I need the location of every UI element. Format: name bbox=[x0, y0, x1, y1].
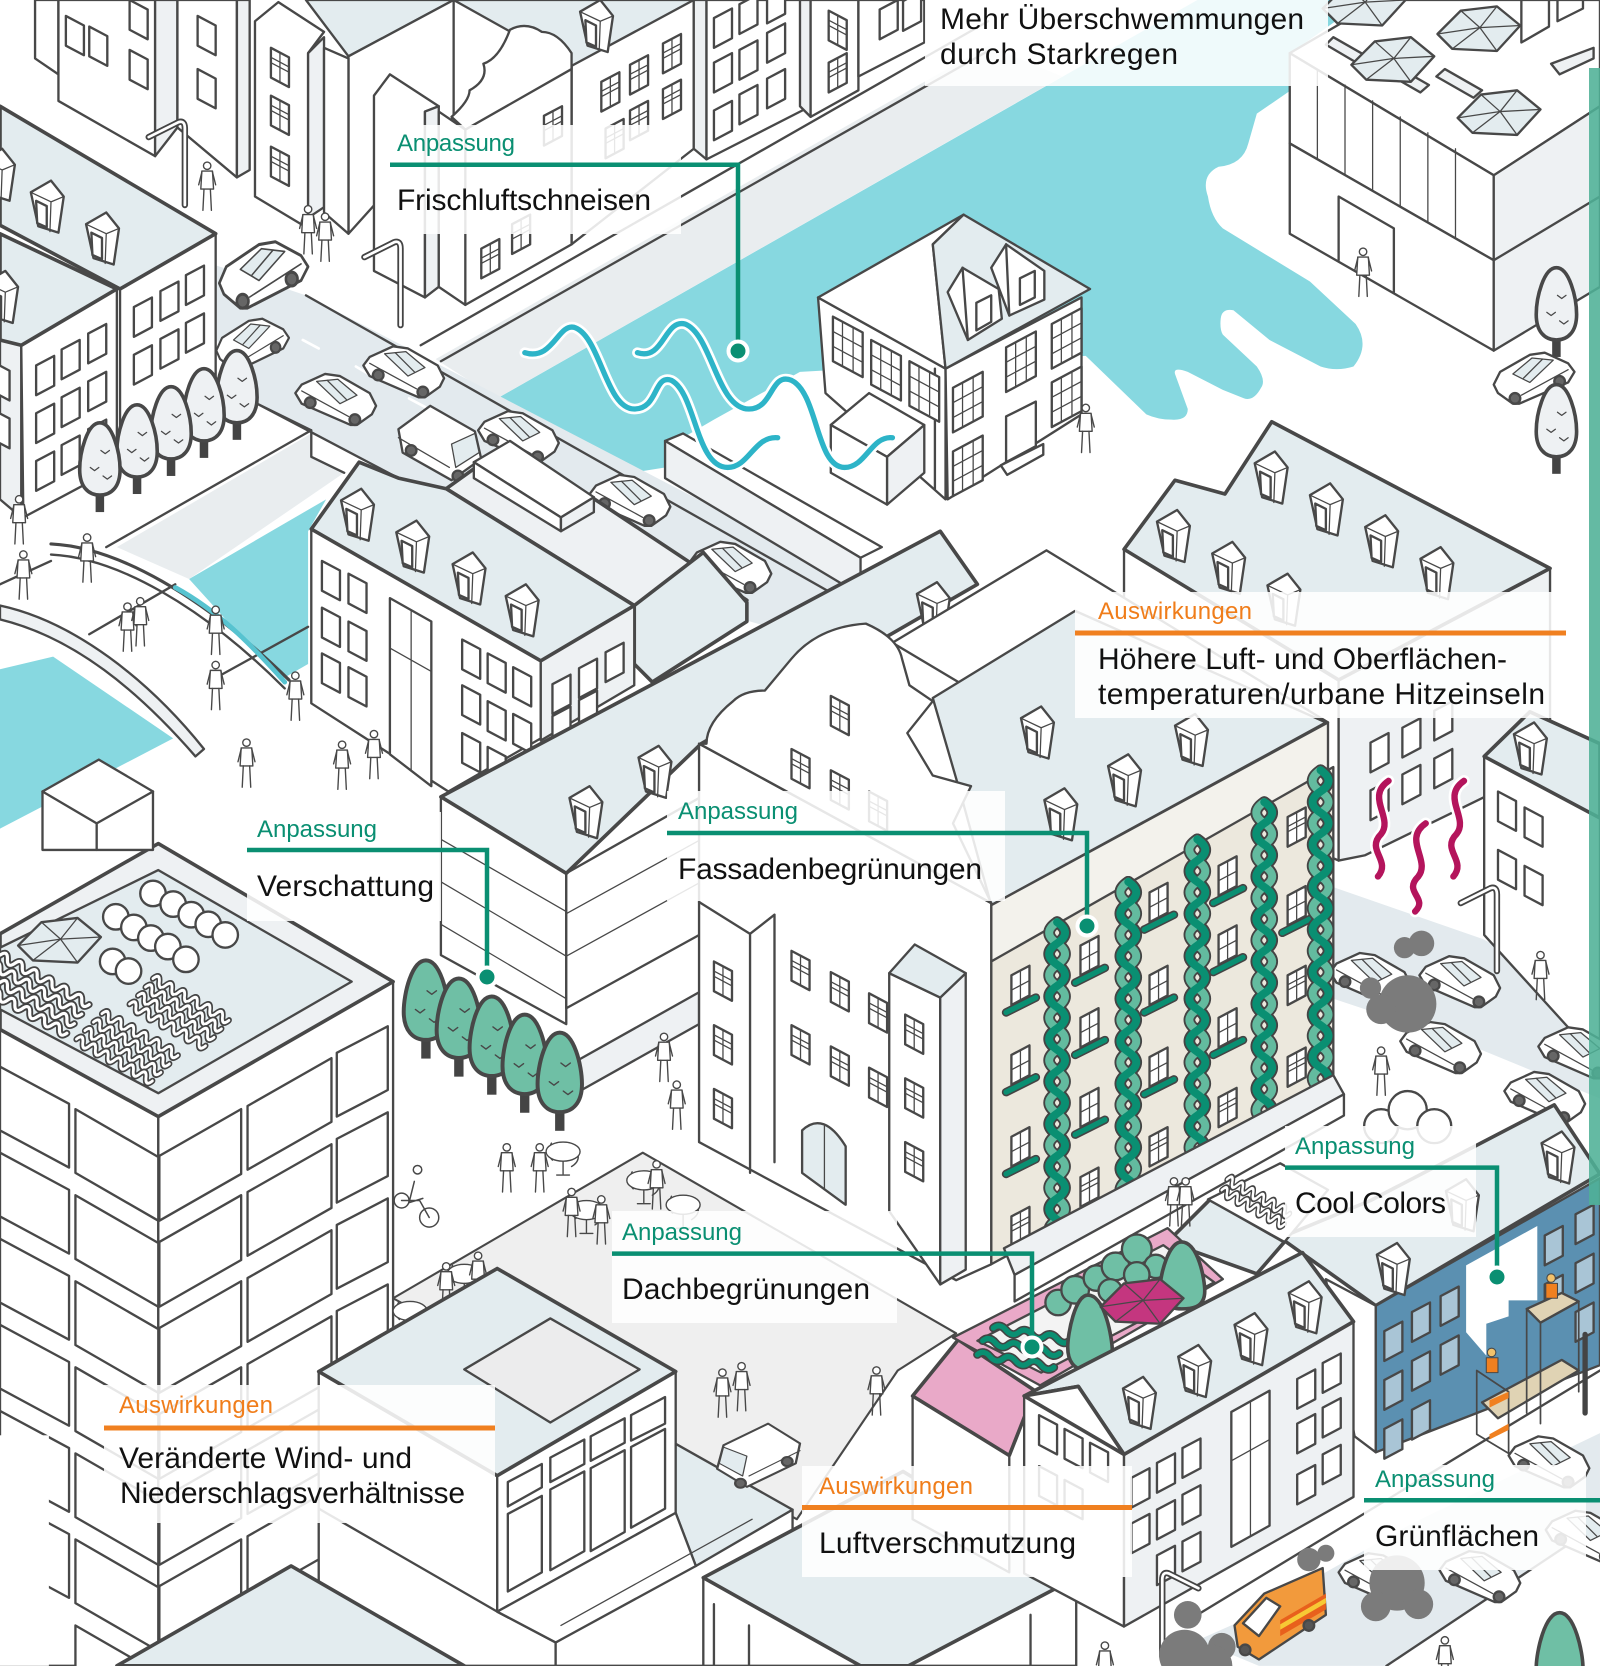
small rooftop box bbox=[42, 760, 153, 850]
street lamp bbox=[364, 242, 401, 325]
ornate white building bbox=[699, 624, 991, 1280]
bridge bbox=[0, 544, 289, 756]
text: flooding: durch Starkregen bbox=[940, 38, 1178, 71]
street lamps lower right bbox=[1162, 1334, 1585, 1656]
heading: Auswirkungen bbox=[1098, 598, 1252, 625]
roof garden building bbox=[913, 1228, 1223, 1572]
street lamp bbox=[149, 122, 185, 205]
big building: flat roof and mansard bbox=[892, 550, 1328, 961]
main road bbox=[217, 266, 882, 659]
rule bbox=[104, 1426, 495, 1430]
smog clouds bottom bbox=[1159, 1545, 1433, 1666]
callout: Grünflächen bbox=[1364, 1465, 1600, 1570]
road lines bbox=[0, 21, 988, 677]
text: Grünflächen bbox=[1375, 1520, 1539, 1553]
marker dot bbox=[728, 342, 748, 360]
low wall by canal bbox=[665, 433, 882, 595]
canal and flood water bbox=[497, 0, 1365, 473]
cafe tables bbox=[393, 1142, 700, 1334]
cars and smog right road bbox=[1330, 953, 1600, 1123]
text: flooding: Mehr Überschwemmungen bbox=[940, 3, 1304, 36]
heading: Anpassung bbox=[397, 130, 515, 157]
rule bbox=[1075, 630, 1566, 636]
mid-lower building bbox=[319, 1269, 676, 1666]
left white margin bbox=[0, 1435, 49, 1666]
building: rooftop terrace block bbox=[1290, 0, 1600, 351]
text: temperaturen/urbane Hitzeinseln bbox=[1098, 678, 1545, 711]
leader line bbox=[390, 165, 738, 351]
faded trees behind cool colors bbox=[1364, 1091, 1451, 1143]
heading: Anpassung bbox=[1375, 1466, 1495, 1493]
callout: Luftverschmutzung bbox=[802, 1466, 1132, 1577]
building: top row right of gable bbox=[800, 0, 924, 117]
terrace wing bbox=[319, 1444, 793, 1666]
smog clouds right bbox=[1360, 931, 1436, 1033]
facade base wall bbox=[1004, 1075, 1344, 1301]
front building with dormers bbox=[1024, 1253, 1353, 1627]
bottom left roof bbox=[117, 1566, 464, 1666]
marker dot bbox=[478, 968, 496, 986]
cyclist bbox=[394, 1165, 439, 1227]
green shading trees bbox=[404, 960, 582, 1131]
heading: Anpassung bbox=[622, 1219, 742, 1246]
text: Cool Colors bbox=[1295, 1187, 1446, 1220]
heading: Auswirkungen bbox=[119, 1392, 273, 1419]
heading: Anpassung bbox=[257, 816, 377, 843]
water under bridge bbox=[0, 499, 326, 829]
building: tower and roof bbox=[255, 0, 454, 234]
text: Dachbegrünungen bbox=[622, 1273, 870, 1306]
building: gabled row bbox=[374, 0, 811, 305]
text: Fassadenbegrünungen bbox=[678, 853, 982, 886]
callout: Frischluftschneisen bbox=[390, 125, 748, 360]
road right bbox=[1330, 886, 1600, 1099]
leader line bbox=[612, 1254, 1032, 1347]
ornate building side tower bbox=[889, 944, 966, 1284]
text: Niederschlagsverhältnisse bbox=[120, 1477, 465, 1510]
callout: Fassadenbegrünungen bbox=[667, 791, 1096, 936]
leader line bbox=[667, 833, 1087, 926]
building: bottom centre bbox=[703, 1471, 1076, 1666]
building: wave roof behind bbox=[1168, 1163, 1328, 1274]
tall office building bbox=[0, 982, 393, 1666]
green tree bottom right bbox=[1536, 1613, 1583, 1666]
marker dot bbox=[1022, 1338, 1042, 1356]
building: far right bbox=[1484, 712, 1600, 1062]
leader line bbox=[247, 850, 487, 977]
callout: Mehr Überschwemmungen bbox=[925, 0, 1328, 86]
building: left corner block bbox=[0, 106, 216, 517]
cars on main road bbox=[216, 242, 771, 593]
building: top left block bbox=[35, 0, 250, 177]
cars bottom road bbox=[1339, 1436, 1600, 1604]
rule bbox=[802, 1505, 1132, 1510]
lamp right bbox=[1461, 888, 1497, 971]
orange van bbox=[1235, 1568, 1326, 1659]
building: back row right with dormers bbox=[1124, 422, 1550, 861]
leader line bbox=[1285, 1168, 1497, 1277]
quay strips bbox=[117, 46, 1062, 579]
scaffold with painters bbox=[1477, 1274, 1579, 1453]
marker dot bbox=[1488, 1268, 1506, 1286]
air flow waves bbox=[525, 324, 892, 467]
office roof garden bbox=[0, 844, 393, 1117]
building: long hipped roof bbox=[441, 531, 977, 1093]
text: Frischluftschneisen bbox=[397, 184, 651, 217]
callout: Veränderte Wind- und Niederschlagsverhältnisse bbox=[104, 1385, 495, 1523]
heading: Anpassung bbox=[678, 798, 798, 825]
callout: Höhere Temperaturen bbox=[1075, 592, 1566, 718]
heading: Auswirkungen bbox=[819, 1473, 973, 1500]
callout: Cool Colors bbox=[1285, 1126, 1506, 1286]
text: Veränderte Wind- und bbox=[119, 1442, 412, 1475]
right edge green strip bbox=[1589, 68, 1600, 1205]
marker dot bbox=[1078, 916, 1096, 936]
grey trees row bbox=[80, 351, 257, 512]
building: central block with dormers bbox=[311, 441, 747, 791]
green facade bbox=[991, 767, 1333, 1264]
callout: Dachbegrünungen bbox=[612, 1211, 1042, 1356]
building: blue cool colors bbox=[1280, 1105, 1600, 1459]
grey plaza bbox=[393, 1153, 956, 1519]
trees and car right bbox=[1494, 268, 1577, 474]
rule bbox=[1364, 1498, 1600, 1502]
building: small house bbox=[818, 215, 1090, 505]
heading: Anpassung bbox=[1295, 1133, 1415, 1160]
text: Verschattung bbox=[257, 870, 434, 903]
van near terrace bbox=[717, 1424, 800, 1488]
text: Höhere Luft- und Oberflächen- bbox=[1098, 643, 1507, 676]
road bottom right bbox=[1197, 1433, 1600, 1666]
text: Luftverschmutzung bbox=[819, 1527, 1076, 1560]
heat waves bbox=[1376, 781, 1464, 912]
callout: Verschattung bbox=[247, 812, 496, 986]
